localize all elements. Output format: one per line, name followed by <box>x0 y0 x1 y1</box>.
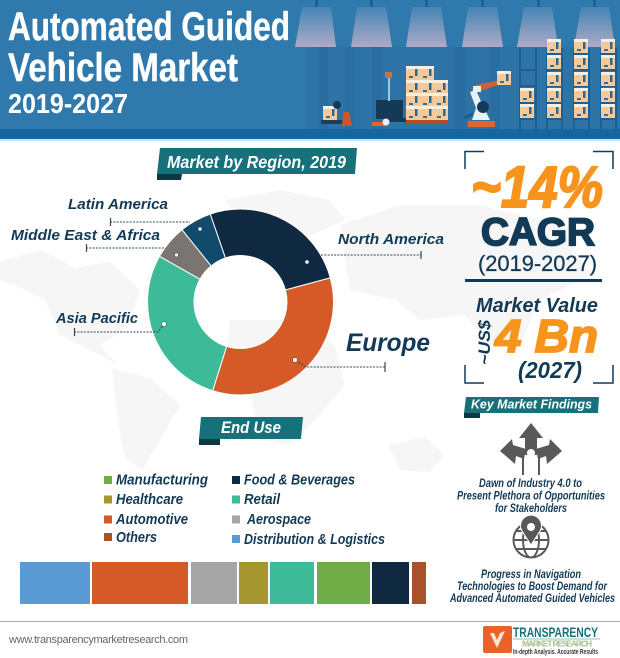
finding: Industry 4.0: Dawn of Industry 4.0 to <box>479 478 582 490</box>
segment: Europe <box>213 278 333 395</box>
stat: 14%: ~14% <box>471 155 603 220</box>
icon: three-way arrows with person <box>500 423 562 475</box>
segment: Latin America <box>182 214 225 266</box>
legend item: others: Others <box>116 530 157 546</box>
ceiling lamps <box>295 7 615 47</box>
label: CAGR: CAGR <box>481 211 595 254</box>
legend item: aerospace: Aerospace <box>246 512 311 528</box>
label: period: (2019-2027) <box>478 251 597 276</box>
label: Asia Pacific: Asia Pacific <box>55 310 139 327</box>
heading: market by region: Market by Region, 2019 <box>167 152 346 172</box>
heading: key market findings <box>464 396 599 418</box>
legend item: retail: Retail <box>244 492 281 508</box>
title <box>8 5 290 119</box>
header banner <box>0 0 620 141</box>
floor strip <box>0 129 620 139</box>
stat: 4 Bn: 4 Bn <box>494 310 598 362</box>
segment: Asia Pacific <box>148 256 227 391</box>
title: Automated Guided <box>8 5 290 49</box>
legend item: food and beverages: Food & Beverages <box>244 472 355 488</box>
donut chart <box>148 209 333 395</box>
legend: end use <box>104 472 385 548</box>
label: Middle East & Africa: Middle East & Africa <box>11 227 160 244</box>
small AGV with box <box>321 101 352 126</box>
segment: North America <box>210 209 330 290</box>
finding: Industry 4.0: for Stakeholders <box>495 503 567 515</box>
warehouse shelves <box>519 39 617 129</box>
robot arm <box>463 71 511 127</box>
heading: end use: End Use <box>221 418 281 437</box>
label: 2027: (2027) <box>518 357 582 383</box>
legend item: automotive: Automotive <box>115 512 188 528</box>
finding: Industry 4.0 <box>457 478 605 515</box>
label: Latin America: Latin America <box>68 196 168 213</box>
region labels and leader lines <box>11 196 444 372</box>
heading: key market findings: Key Market Findings <box>471 396 592 412</box>
segment: Middle East & Africa <box>160 230 211 279</box>
label: market value: Market Value <box>476 295 598 317</box>
icon: globe with pin <box>514 515 548 558</box>
legend item: distribution and logistics: Distribution & Logistics <box>244 532 385 548</box>
world map background <box>0 190 590 472</box>
heading: end use <box>199 417 303 445</box>
logo: Transparency Market Research: MARKET RESEARCH <box>522 638 592 648</box>
label: US$: ~US$ <box>475 319 494 365</box>
heading: market by region <box>157 148 357 180</box>
label: Europe: Europe <box>346 329 430 357</box>
logo: Transparency Market Research <box>483 624 600 656</box>
legend item: others <box>104 530 157 546</box>
legend item: healthcare: Healthcare <box>116 492 183 508</box>
label: North America: North America <box>338 231 444 248</box>
footer url: www.transparencymarketresearch.com <box>8 634 188 646</box>
title: Vehicle Market <box>8 46 238 90</box>
panel: CAGR and market value <box>465 152 613 383</box>
finding: navigation technologies: Progress in Navigation <box>481 569 581 581</box>
legend item: manufacturing: Manufacturing <box>116 472 208 488</box>
finding: navigation technologies <box>449 569 615 605</box>
title: 2019-2027 <box>8 88 128 119</box>
stacked bar: end use share <box>20 562 426 604</box>
pallet stack and truck <box>372 66 448 126</box>
